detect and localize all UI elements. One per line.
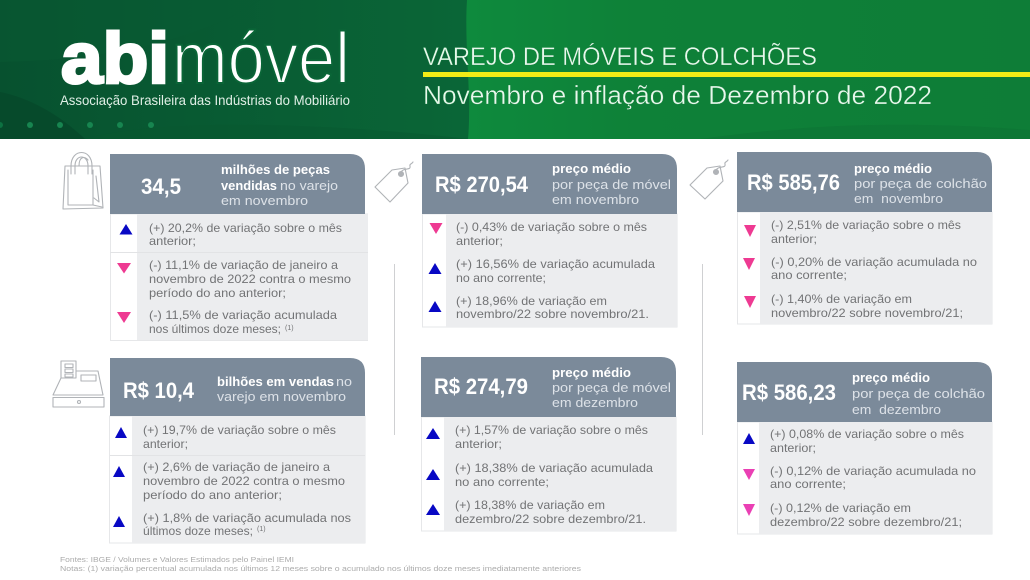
item: month change: anterior; (143, 437, 188, 451)
header caption: vendidas (221, 178, 277, 193)
header caption: por peça de colchão (854, 176, 987, 191)
icon: price tag, furniture (375, 162, 413, 202)
item: year to date (117, 258, 351, 300)
item: month change: anterior; (455, 437, 502, 451)
panel: mattress price, november (737, 152, 992, 324)
card header (110, 358, 365, 416)
item: month change (120, 221, 342, 248)
item: twelve months: últimos doze meses; (143, 524, 253, 538)
icon: price tag, mattress (690, 160, 728, 199)
item: month change (430, 220, 647, 248)
item: year to date (113, 460, 345, 502)
header caption: preço médio (852, 370, 930, 385)
item: year to date (426, 461, 653, 489)
item: year to date: (-) 11,1% de variação de janeiro a (149, 258, 338, 272)
header caption (552, 161, 671, 207)
item: twelve months: nos últimos doze meses; (149, 322, 281, 336)
header caption: por peça de colchão (852, 386, 985, 401)
big number: R$ 585,76 (747, 170, 840, 195)
header caption: em novembro (221, 193, 308, 208)
card header (422, 154, 677, 214)
card body (110, 416, 365, 543)
footnotes: Fontes: IBGE / Volumes e Valores Estimados pelo Painel IEMI (60, 555, 294, 564)
logo: abimóvel: móvel (172, 19, 350, 99)
big number: R$ 274,79 (434, 374, 528, 399)
header caption: por peça de móvel (552, 380, 671, 395)
item: year to date: novembro de 2022 contra o mesmo (143, 474, 345, 488)
item: year over year (428, 294, 649, 321)
item: month change: anterior; (456, 234, 503, 248)
item: twelve months: (1) (285, 325, 294, 332)
item: year over year: (+) 18,96% de variação em (456, 294, 607, 308)
header caption (854, 161, 987, 206)
icon: cash register (53, 361, 104, 407)
item: month change: (-) 2,51% de variação sobre o mês (771, 218, 961, 232)
item: year to date: ano corrente; (771, 268, 847, 282)
title: VAREJO DE MÓVEIS E COLCHÕES (423, 42, 817, 71)
header caption: preço médio (854, 161, 932, 176)
item: twelve months (117, 308, 337, 336)
header caption: no (336, 374, 352, 389)
card body (738, 422, 992, 534)
item: twelve months: (1) (257, 526, 266, 533)
item: year to date: novembro de 2022 contra o mesmo (149, 272, 351, 286)
item: year to date: (+) 2,6% de variação de janeiro a (143, 460, 330, 474)
item: month change: anterior; (771, 232, 817, 246)
item: twelve months: (+) 1,8% de variação acumulada nos (143, 511, 351, 525)
card header (737, 362, 992, 422)
header caption: por peça de móvel (552, 177, 671, 192)
item: year over year (426, 498, 646, 526)
panel: pieces sold (110, 154, 368, 340)
item: year over year: (-) 0,12% de variação em (770, 501, 911, 515)
header caption: em dezembro (552, 395, 638, 410)
item: month change (743, 427, 964, 455)
panel: furniture price, december (421, 357, 676, 531)
big number: R$ 10,4 (123, 378, 195, 403)
decorative dots (0, 122, 154, 128)
header caption: em novembro (552, 192, 639, 207)
item: year to date: período do ano anterior; (149, 286, 286, 300)
item: year over year (744, 292, 963, 320)
card body (110, 214, 368, 340)
item: year over year: (-) 1,40% de variação em (771, 292, 912, 306)
panel: furniture price, november (422, 154, 677, 327)
header caption (552, 365, 671, 410)
card header (737, 152, 992, 212)
item: month change: (+) 0,08% de variação sobre o mês (770, 427, 964, 441)
item: year over year: novembro/22 sobre novembro/21; (771, 306, 963, 320)
item: year to date: ano corrente; (770, 477, 846, 491)
logo: abimóvel: Associação Brasileira das Indústrias do Mobiliário (60, 92, 350, 108)
item: year over year: (+) 18,38% de variação em (455, 498, 605, 512)
item: year to date (428, 257, 655, 285)
item: month change: (+) 20,2% de variação sobre o mês (149, 221, 342, 235)
item: year to date: (-) 0,20% de variação acumulada no (771, 255, 977, 269)
panel: mattress price, december (737, 362, 992, 534)
item: month change (115, 423, 336, 451)
logo: abimóvel (60, 19, 350, 108)
big number: 34,5 (141, 174, 181, 199)
logo: abimóvel: abi (61, 20, 169, 99)
header caption: bilhões em vendas (217, 374, 334, 389)
item: year to date (743, 464, 976, 491)
item: year to date: no ano corrente; (456, 271, 546, 285)
item: year over year (743, 501, 962, 529)
yellow rule (423, 72, 1030, 77)
item: year to date: (-) 0,12% de variação acumulada no (770, 464, 976, 478)
item: year to date: (+) 16,56% de variação acumulada (456, 257, 655, 271)
header caption: preço médio (552, 365, 631, 380)
card body (422, 417, 676, 531)
header caption (217, 374, 352, 404)
item: year over year: dezembro/22 sobre dezembro/21. (455, 512, 646, 526)
header caption: milhões de peças (221, 162, 330, 177)
item: year to date: (+) 18,38% de variação acumulada (455, 461, 653, 475)
header banner (0, 0, 1030, 139)
header caption: preço médio (552, 161, 631, 176)
item: month change: anterior; (770, 441, 816, 455)
item: year over year: dezembro/22 sobre dezembro/21; (770, 515, 962, 529)
item: month change: anterior; (149, 234, 196, 248)
item: month change: (-) 0,43% de variação sobre o mês (456, 220, 647, 234)
card header (110, 154, 365, 214)
header caption (852, 370, 985, 417)
item: month change (426, 423, 648, 451)
item: year to date: período do ano anterior; (143, 488, 282, 502)
footnotes (60, 555, 581, 573)
header caption: no varejo (280, 178, 338, 193)
item: month change (744, 218, 961, 246)
card body (422, 214, 677, 327)
icon: shopping bag (63, 152, 103, 209)
item: year over year: novembro/22 sobre novembro/21. (456, 307, 649, 321)
big number: R$ 586,23 (742, 380, 836, 405)
item: month change: (+) 1,57% de variação sobre o mês (455, 423, 648, 437)
item: year to date (743, 255, 977, 282)
header caption: em dezembro (852, 402, 941, 417)
item: month change: (+) 19,7% de variação sobre o mês (143, 423, 336, 437)
card body (738, 212, 992, 324)
big number: R$ 270,54 (435, 172, 529, 197)
item: year to date: no ano corrente; (455, 475, 549, 489)
header caption (221, 162, 338, 208)
header caption: em novembro (854, 191, 943, 206)
subtitle: Novembro e inflação de Dezembro de 2022 (423, 80, 932, 110)
item: twelve months (113, 511, 351, 538)
footnotes: Notas: (1) variação percentual acumulada nos últimos 12 meses sobre o acumulado nos últimos doze meses imediatamente anteriores (60, 564, 581, 573)
item: twelve months: (-) 11,5% de variação acumulada (149, 308, 337, 322)
card header (421, 357, 676, 417)
header caption: varejo em novembro (217, 389, 346, 404)
panel: sales value (110, 358, 365, 543)
